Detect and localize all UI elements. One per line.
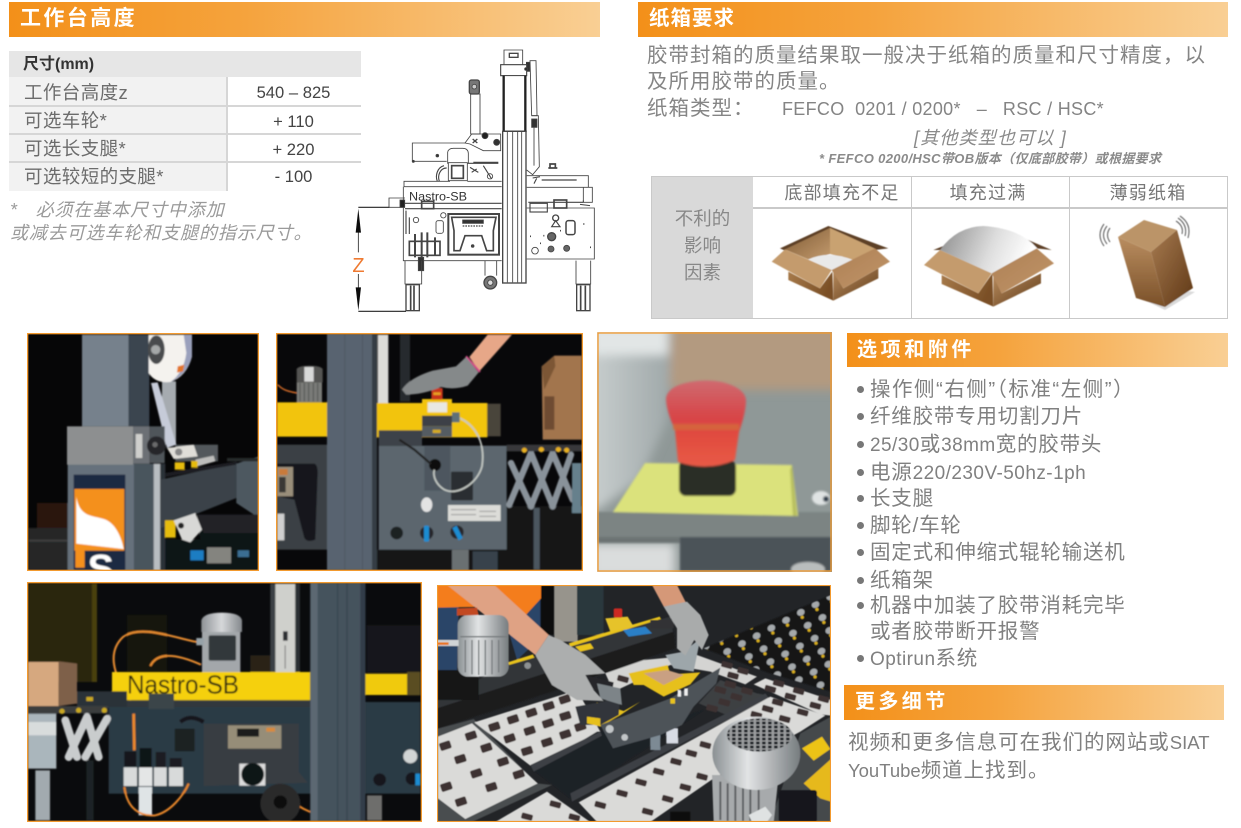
tape head (575, 638, 720, 748)
row: optional short legs: 可选较短的支腿* (24, 166, 164, 187)
collar (67, 426, 133, 465)
list item: 或者胶带断开报警 (870, 620, 1040, 643)
row: optional wheels (24, 110, 314, 131)
lower rail (77, 691, 127, 708)
panel: more details (844, 685, 1224, 782)
row label (652, 177, 753, 318)
machine line drawing (352, 50, 595, 312)
glove left (535, 635, 605, 701)
motor (297, 382, 322, 402)
row: optional long legs: 可选长支腿* (24, 138, 126, 159)
motor right (712, 775, 779, 822)
carton (28, 662, 59, 706)
wood background (670, 325, 840, 390)
background post (540, 585, 554, 635)
legs (405, 261, 591, 311)
vest (437, 585, 541, 617)
heading: workbench height: 工作台高度 (20, 7, 137, 30)
machine top (598, 512, 831, 539)
text: more details: 视频和更多信息可在我们的网站或SIAT (848, 731, 1210, 754)
row: optional wheels: + 110 (273, 112, 314, 131)
support post (327, 334, 377, 570)
button base (679, 460, 736, 496)
main body (389, 164, 594, 261)
bottom cables (124, 714, 310, 816)
upper carriage (412, 133, 501, 181)
icon: overfilled carton (924, 226, 1054, 307)
heading: carton requirements: 纸箱要求 (649, 7, 735, 30)
arm and glove (469, 335, 512, 371)
list item: Optirun系统 (870, 647, 978, 670)
gauge and label (421, 497, 432, 512)
list item (857, 594, 1126, 643)
motor left (458, 615, 509, 677)
tape roll (149, 335, 192, 382)
footnote (10, 200, 312, 243)
dark left panel (277, 445, 327, 550)
photo: Nastro-SB machine front (27, 582, 422, 822)
glove right (664, 602, 709, 656)
row: optional short legs (24, 166, 312, 187)
upper column (82, 335, 129, 426)
roller bed (704, 595, 831, 692)
plate top right (754, 678, 831, 716)
arms (447, 585, 549, 655)
column (501, 50, 527, 283)
carton (542, 356, 582, 440)
list item: 操作侧“右侧”（标准“左侧”） (870, 378, 1135, 401)
row label: 因素 (684, 262, 721, 283)
yellow beam (112, 672, 310, 700)
yellow plate (613, 463, 798, 516)
text: more details: YouTube频道上找到。 (848, 759, 1049, 782)
dark roller section (699, 680, 767, 717)
motor (201, 613, 242, 632)
footnote: 或减去可选车轮和支腿的指示尺寸。 (10, 223, 312, 243)
table: adverse factors (651, 176, 1228, 319)
valves (124, 767, 137, 786)
roller plate (175, 445, 218, 461)
red dome (666, 380, 746, 467)
plate B (474, 690, 600, 766)
yellow beams (277, 402, 327, 437)
cable (434, 416, 483, 491)
dark block under motor (437, 670, 479, 700)
control panel (448, 214, 499, 255)
white post (378, 335, 388, 403)
plate C (579, 697, 825, 822)
right panel (365, 702, 420, 794)
jeans (437, 607, 459, 675)
list item: 电源220/230V-50hz-1ph (870, 461, 1086, 484)
blurred left object (590, 325, 672, 510)
table header (9, 51, 361, 77)
heading: options: 选项和附件 (857, 339, 975, 361)
tape arms (469, 61, 539, 175)
icons: carton illustrations (771, 225, 1054, 308)
panel: workbench height (9, 2, 600, 312)
heading: more details: 更多细节 (855, 691, 949, 713)
e-stop box (605, 617, 634, 632)
heading: carton requirements (638, 2, 1228, 37)
right panel details (530, 215, 591, 254)
row: optional long legs (24, 138, 314, 159)
list item: 纤维胶带专用切割刀片 (870, 405, 1083, 428)
list item: 固定式和伸缩式辊轮输送机 (870, 541, 1126, 564)
knobs (390, 527, 403, 539)
plate A (438, 723, 538, 819)
arm (161, 463, 236, 528)
icon: weak carton (1098, 215, 1194, 310)
e-stop box (422, 399, 452, 416)
row label: 影响 (684, 235, 721, 256)
footnote: FEFCO: * FEFCO 0200/HSC带OB版本（仅底部胶带）或根据要求 (819, 151, 1161, 166)
carrier plate strip (437, 719, 552, 822)
bracket (162, 381, 176, 445)
row: optional short legs: - 100 (275, 167, 312, 186)
list item: 25/30或38mm宽的胶带头 (870, 433, 1102, 456)
plate D (495, 792, 590, 822)
Z dimension (352, 207, 406, 311)
intro text: 及所用胶带的质量。 (647, 70, 840, 93)
warning label (802, 737, 830, 761)
background parts (37, 503, 68, 528)
list: options (857, 378, 1135, 670)
right gray base (770, 717, 831, 822)
photo: red emergency button (597, 332, 832, 572)
row: optional long legs: + 220 (272, 140, 314, 159)
lower conveyor (165, 515, 259, 570)
control box (204, 724, 308, 786)
floor (506, 506, 583, 570)
yellow and link (165, 520, 176, 538)
row: workbench height z (24, 82, 330, 103)
note: other types: [其他类型也可以 ] (914, 128, 1067, 148)
intro text: 胶带封箱的质量结果取一般决于纸箱的质量和尺寸精度，以 (647, 44, 1206, 67)
column: weak carton: 薄弱纸箱 (1110, 183, 1186, 203)
intro text (647, 44, 1206, 120)
row label: 不利的 (675, 208, 730, 229)
lower frame (68, 464, 134, 570)
heading: workbench height (9, 2, 600, 37)
main panel (379, 446, 507, 550)
belt base and yellow rail (437, 617, 676, 729)
row: workbench height z: 540 – 825 (257, 83, 330, 102)
beam label: Nastro-SB (127, 670, 239, 700)
logo (74, 475, 125, 570)
Z dimension: Z (352, 255, 365, 277)
column: overfilled: 填充过满 (950, 183, 1026, 203)
dim background (29, 584, 97, 682)
heading: more details (844, 685, 1224, 720)
list item: 机器中加装了胶带消耗完毕 (870, 594, 1126, 617)
cables (114, 632, 201, 714)
plate behind head (605, 655, 757, 692)
post (310, 583, 365, 821)
gap (534, 710, 704, 798)
photo: tape head maintenance (437, 585, 831, 822)
scissor conveyor (509, 453, 573, 506)
intro text: FEFCO 0201 / 0200* – RSC / HSC* (782, 99, 1104, 119)
table header: 尺寸(mm) (23, 56, 94, 73)
side screw (812, 491, 830, 505)
white post (270, 584, 275, 673)
row: workbench height z: 工作台高度z (24, 82, 128, 103)
machine name: Nastro-SB (409, 189, 467, 203)
row: optional wheels: 可选车轮* (24, 110, 107, 131)
panel: carton requirements (638, 2, 1228, 319)
photo: emergency stop press (276, 333, 583, 571)
list item: 长支腿 (870, 487, 934, 510)
intro text: 纸箱类型： (647, 97, 754, 120)
column: underfilled: 底部填充不足 (784, 183, 900, 203)
bottom disk (260, 784, 300, 824)
heading: options (847, 333, 1228, 367)
table: dimensions (9, 51, 361, 191)
left device (28, 706, 108, 713)
icon: underfilled carton (772, 226, 890, 301)
list item: 纸箱架 (870, 569, 934, 592)
photo: tape head on column (27, 333, 259, 571)
footnote: * 必须在基本尺寸中添加 (10, 200, 225, 220)
pneumatic parts (409, 232, 440, 271)
main panel (109, 707, 310, 794)
list item: 脚轮/车轮 (870, 514, 962, 537)
text: more details (848, 731, 1210, 782)
